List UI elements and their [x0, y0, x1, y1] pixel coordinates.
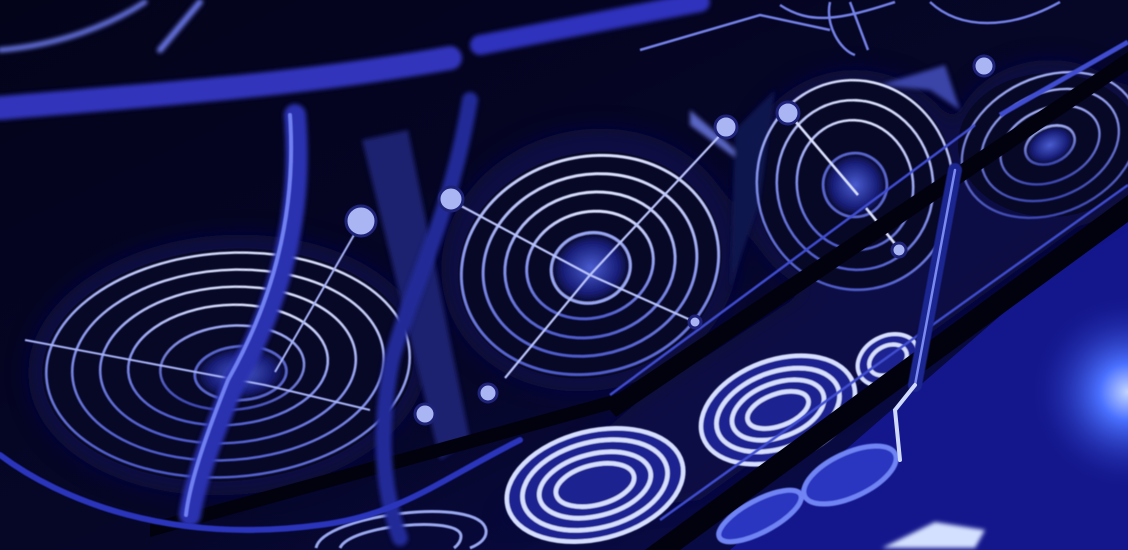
fan housings	[34, 73, 1128, 494]
black beams	[150, 52, 1128, 550]
beam highlights	[610, 42, 1128, 520]
top cables	[0, 2, 700, 108]
fan 2	[459, 153, 721, 377]
fan 1 spokes	[25, 228, 370, 410]
fan 1	[44, 250, 412, 480]
fan 3	[754, 78, 952, 292]
lower fans	[316, 324, 928, 550]
lower right lit panel	[730, 205, 1128, 550]
vertical cables	[0, 100, 955, 538]
top wiring	[640, 2, 1060, 55]
housing plates	[362, 65, 960, 460]
fan 3 spokes	[794, 121, 896, 244]
fan 2 spokes	[450, 130, 725, 378]
fan 4	[960, 70, 1128, 220]
screws	[346, 56, 994, 424]
